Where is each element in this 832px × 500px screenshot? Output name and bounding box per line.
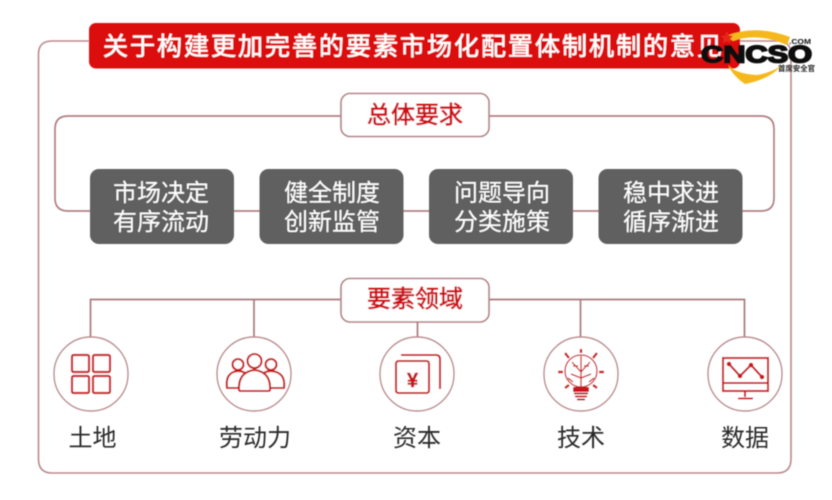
- item: technology: 技术: [557, 425, 605, 452]
- icon: land grid: [72, 355, 110, 393]
- requirement card 3: 问题导向: [454, 180, 550, 207]
- requirement card 1: [90, 169, 234, 244]
- requirement card 2: [260, 169, 404, 244]
- item: land: [54, 337, 128, 452]
- connector: factor domains tree: [90, 300, 744, 338]
- icon: monitor chart: [723, 358, 768, 398]
- title banner: [89, 23, 740, 68]
- logo: CNCSO watermark: .COM: [789, 37, 811, 46]
- requirement card 4: 循序渐进: [623, 209, 719, 236]
- icon: star: [721, 31, 733, 43]
- item: data: [708, 337, 782, 452]
- icon: banknotes: ¥: [407, 370, 419, 392]
- outer frame: [38, 41, 791, 473]
- icon: shield: [726, 30, 790, 84]
- item: capital: 资本: [393, 425, 441, 452]
- icon: brain bulb: [558, 349, 604, 400]
- item: capital: [380, 337, 454, 452]
- requirement card 1: 市场决定: [113, 180, 209, 207]
- requirement card 2: 创新监管: [284, 209, 380, 236]
- item: labor: [217, 337, 291, 452]
- requirement card 2: 健全制度: [284, 180, 380, 207]
- requirement card 3: [429, 169, 573, 244]
- requirement card 3: 分类施策: [454, 209, 550, 236]
- title banner: 关于构建更加完善的要素市场化配置体制机制的意见: [103, 33, 724, 61]
- icon: people: [227, 354, 284, 391]
- item: data: 数据: [721, 425, 769, 452]
- item: land: 土地: [68, 425, 116, 452]
- requirement card 1: 有序流动: [113, 209, 209, 236]
- item: labor: 劳动力: [219, 425, 291, 452]
- item: technology: [544, 337, 618, 452]
- heading: factor domains: 要素领域: [367, 286, 463, 313]
- requirement card 4: 稳中求进: [623, 180, 719, 207]
- logo: CNCSO watermark: [701, 30, 815, 84]
- heading: factor domains: [341, 278, 489, 322]
- logo: CNCSO watermark: CNCSO: [701, 42, 812, 68]
- logo: CNCSO watermark: 首席安全官: [778, 63, 815, 73]
- heading: general requirements: 总体要求: [367, 102, 463, 129]
- requirement card 4: [598, 169, 742, 244]
- heading: general requirements: [341, 94, 489, 136]
- connector: general requirements loop: [55, 116, 774, 211]
